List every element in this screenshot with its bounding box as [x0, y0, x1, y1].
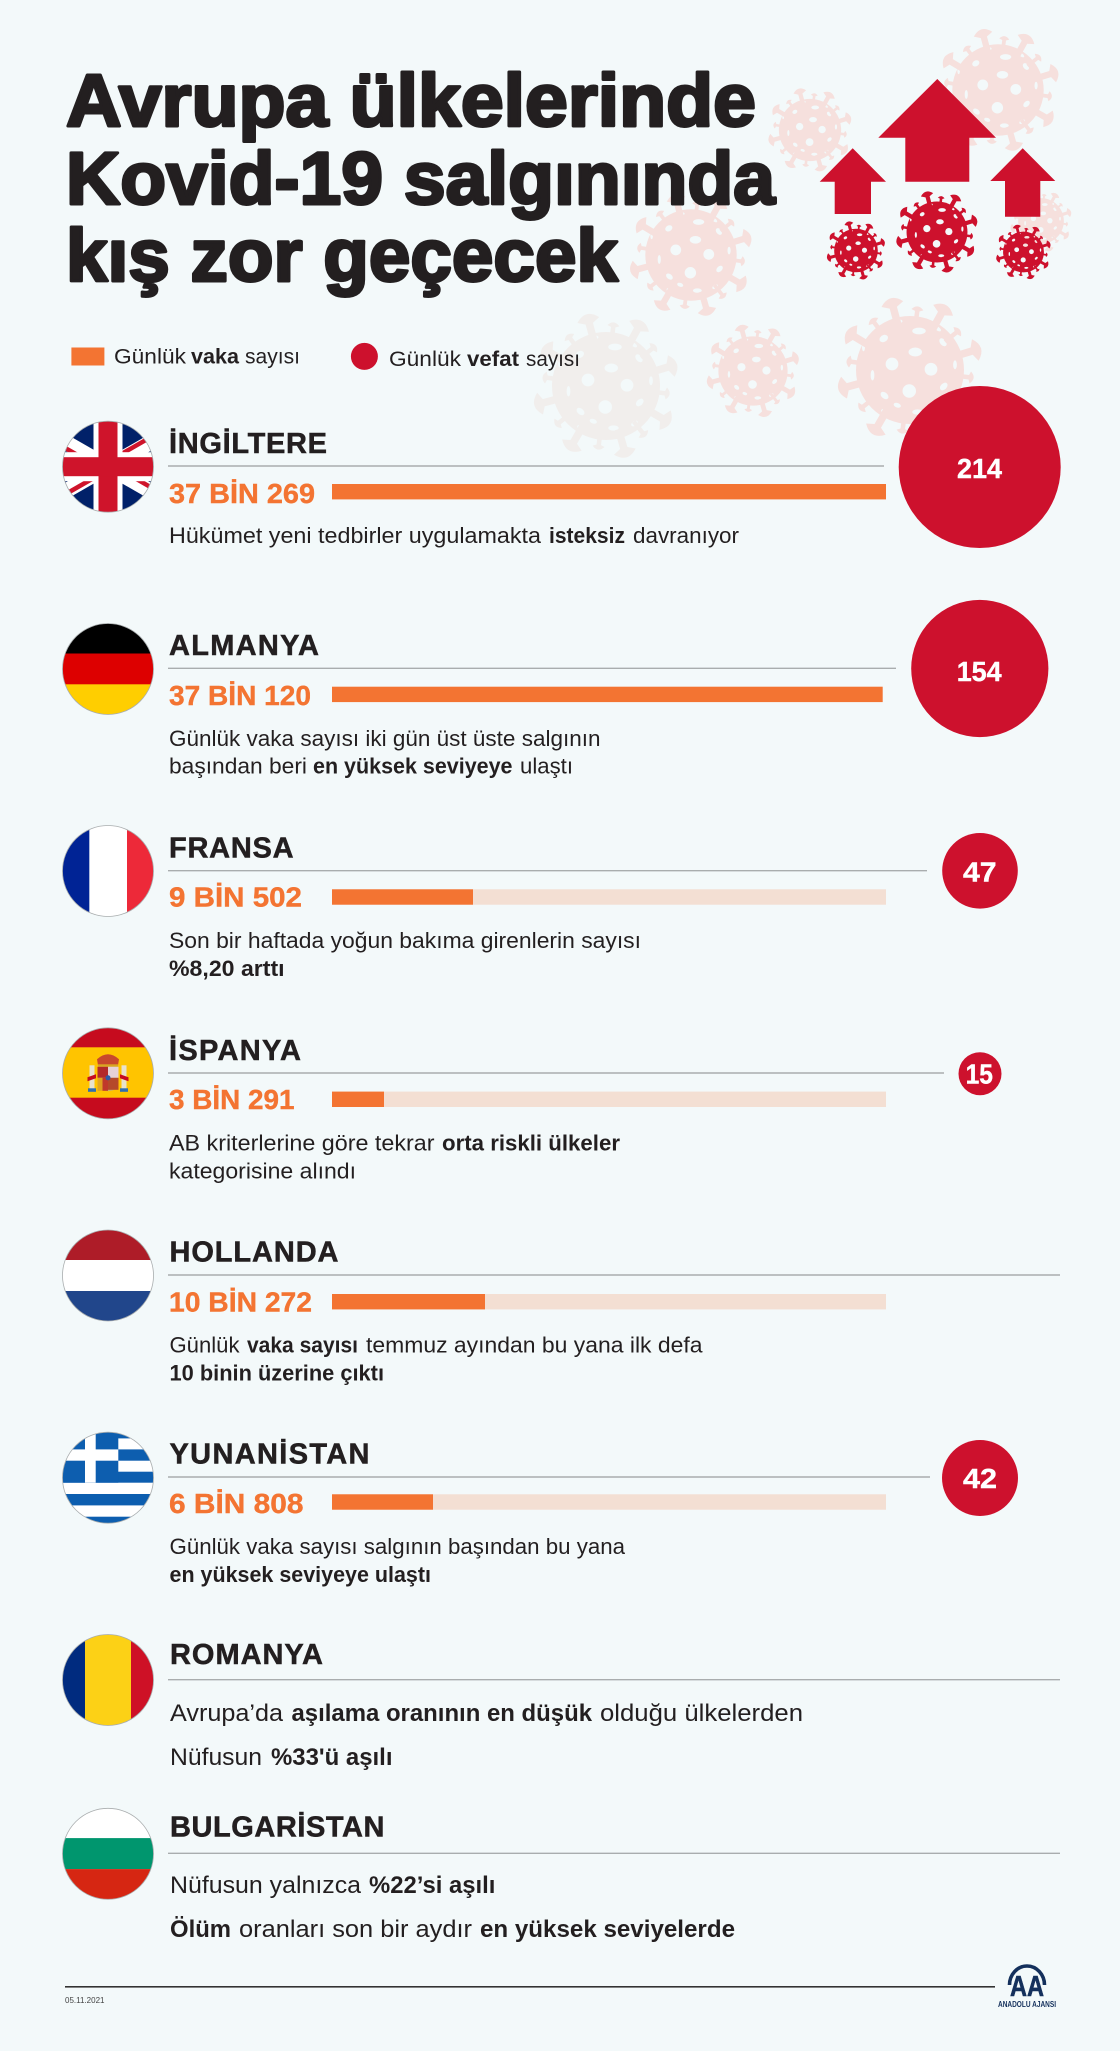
circle: daily deaths: 214	[957, 453, 1002, 484]
bar: daily cases	[332, 687, 883, 702]
description	[170, 1333, 703, 1386]
title: Kovid-19 salgınında	[66, 137, 776, 220]
legend label: daily cases: vaka	[191, 346, 239, 369]
circle: daily deaths: 47	[963, 856, 997, 887]
number: daily cases: 3 BİN 291	[169, 1084, 294, 1115]
description	[170, 1700, 803, 1771]
description: %8,20 arttı	[169, 956, 285, 981]
description: Ölüm	[170, 1916, 231, 1943]
description	[169, 726, 600, 778]
number: daily cases: 37 BİN 120	[169, 680, 311, 711]
description: olduğu ülkelerden	[600, 1700, 803, 1727]
legend label: daily deaths: Günlük	[389, 348, 462, 371]
icon: coat of arms	[88, 1054, 128, 1092]
description: AB kriterlerine göre tekrar	[169, 1130, 434, 1155]
number: daily cases: 6 BİN 808	[169, 1488, 304, 1519]
description: kategorisine alındı	[169, 1158, 356, 1183]
legend	[71, 343, 580, 371]
panel: Bulgaristan	[62, 1808, 1060, 1943]
description: oranları son bir aydır	[239, 1916, 472, 1943]
heading: BULGARİSTAN	[170, 1812, 384, 1844]
decorative background viruses	[531, 27, 1072, 460]
circle: daily deaths	[942, 1440, 1018, 1516]
circle: daily deaths: 42	[963, 1463, 997, 1494]
icon: large virus	[895, 190, 979, 274]
circle: daily deaths	[942, 833, 1018, 909]
legend swatch: daily deaths	[351, 343, 378, 370]
icon: right arrow	[990, 148, 1055, 217]
description	[169, 928, 641, 981]
panel: Romanya	[62, 1634, 1060, 1771]
description: 10 binin üzerine çıktı	[170, 1361, 384, 1386]
description: Nüfusun yalnızca	[170, 1872, 362, 1899]
legend swatch: daily cases	[71, 348, 104, 366]
flag: United Kingdom	[62, 420, 154, 513]
circle: daily deaths	[958, 1052, 1002, 1095]
description: başından beri	[169, 754, 307, 778]
heading: İNGİLTERE	[169, 428, 327, 460]
legend label: daily cases: sayısı	[245, 346, 300, 369]
description: vaka sayısı	[247, 1333, 358, 1358]
panel: İngiltere	[28, 386, 1061, 548]
title: kış zor geçecek	[66, 214, 619, 297]
bar: daily cases	[332, 889, 886, 905]
description: Günlük vaka sayısı salgının başından bu yana	[170, 1534, 626, 1559]
icon: rising arrows and viruses	[820, 79, 1055, 281]
flag: Germany	[62, 623, 154, 715]
flag: Netherlands	[62, 1230, 154, 1322]
description: temmuz ayından bu yana ilk defa	[366, 1333, 703, 1358]
heading: ALMANYA	[169, 630, 319, 662]
panel: Fransa	[62, 825, 1018, 981]
description: aşılama oranının en düşük	[292, 1700, 593, 1727]
panel: Yunanistan	[62, 1432, 1018, 1587]
logo: Anadolu Ajansı: ANADOLU AJANSI	[998, 1999, 1056, 2009]
heading: HOLLANDA	[170, 1237, 339, 1269]
icon: large arrow	[878, 79, 996, 182]
heading: FRANSA	[169, 833, 294, 865]
description: Günlük	[170, 1333, 240, 1358]
heading: ROMANYA	[170, 1639, 323, 1671]
description	[169, 1130, 620, 1183]
heading: İSPANYA	[169, 1035, 301, 1067]
date: 05.11.2021	[65, 1995, 105, 2005]
legend label: daily cases	[114, 346, 300, 369]
panel: Almanya	[62, 600, 1048, 778]
bar: daily cases	[332, 1294, 886, 1309]
number: daily cases: 9 BİN 502	[169, 882, 302, 913]
bar: daily cases	[332, 1092, 886, 1107]
flag: Greece	[62, 1432, 154, 1524]
icon: left arrow	[820, 148, 886, 214]
logo: Anadolu Ajansı: AA	[1010, 1971, 1044, 2003]
number: daily cases: 10 BİN 272	[169, 1287, 312, 1318]
bar: daily cases	[332, 1494, 886, 1510]
description: Avrupa’da	[170, 1700, 284, 1727]
description	[170, 1534, 626, 1587]
description: en yüksek seviyeye ulaştı	[170, 1562, 431, 1587]
description	[169, 523, 739, 548]
circle: daily deaths: 15	[966, 1058, 993, 1090]
icon: right virus	[995, 224, 1052, 280]
description: %33'ü aşılı	[271, 1744, 392, 1771]
description: en yüksek seviyelerde	[480, 1916, 735, 1943]
description: Hükümet yeni tedbirler uygulamakta	[169, 523, 542, 548]
circle: daily deaths: 154	[957, 656, 1002, 687]
title: Avrupa ülkelerinde	[66, 59, 756, 142]
bar: daily cases	[332, 484, 886, 499]
panel: İspanya	[62, 1027, 1002, 1183]
panel: Hollanda	[62, 1230, 1060, 1386]
description: davranıyor	[633, 523, 739, 548]
description: en yüksek seviyeye	[313, 754, 512, 778]
description: Son bir haftada yoğun bakıma girenlerin sayısı	[169, 928, 641, 953]
circle: daily deaths	[911, 600, 1048, 737]
logo: Anadolu Ajansı	[998, 1966, 1056, 2009]
legend label: daily deaths: vefat	[467, 348, 519, 371]
flag: France	[62, 825, 154, 917]
circle: daily deaths	[899, 386, 1061, 548]
description: Günlük vaka sayısı iki gün üst üste salgının	[169, 726, 600, 751]
footer rule	[65, 1986, 995, 1988]
flag: Bulgaria	[62, 1808, 154, 1900]
description: ulaştı	[520, 754, 573, 778]
description: isteksiz	[549, 523, 625, 548]
description: Nüfusun	[170, 1744, 262, 1771]
description	[170, 1872, 735, 1943]
legend label: daily deaths	[389, 348, 580, 371]
flag: Spain	[62, 1027, 154, 1119]
legend label: daily cases: Günlük	[114, 346, 187, 369]
icon: left virus	[826, 220, 886, 281]
description: %22’si aşılı	[369, 1872, 495, 1899]
heading: YUNANİSTAN	[170, 1438, 370, 1470]
legend label: daily deaths: sayısı	[526, 348, 580, 371]
flag: Romania	[62, 1634, 154, 1726]
title	[66, 59, 776, 297]
description: orta riskli ülkeler	[442, 1130, 620, 1155]
number: daily cases: 37 BİN 269	[169, 478, 315, 509]
